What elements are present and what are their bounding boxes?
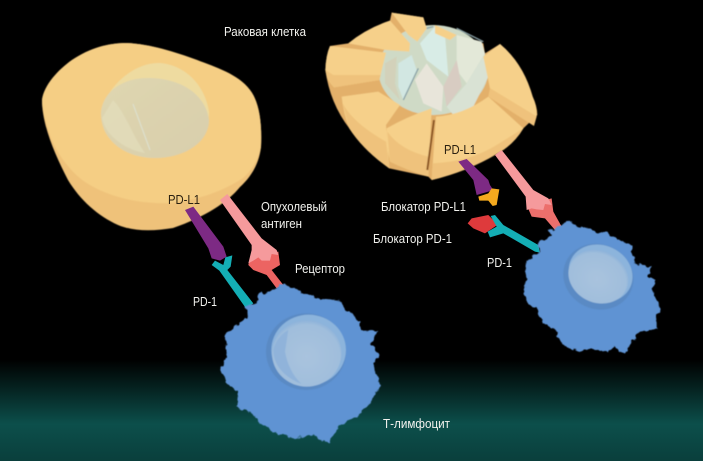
left receptors [185, 194, 283, 308]
right T-cell nucleus [552, 232, 644, 321]
label: antigen line 2: антиген [261, 216, 302, 231]
PD-L1 blocker yellow [478, 188, 499, 206]
tumour antigen pink [495, 150, 552, 210]
label: PD-1 blocker: Блокатор PD-1 [373, 231, 452, 246]
labels [168, 24, 512, 431]
PD-1 blocker red [468, 215, 497, 233]
top surface [42, 43, 261, 203]
left cancer cell [42, 43, 261, 230]
right T-cell [523, 222, 660, 355]
label: PD-1 right: PD-1 [487, 255, 512, 270]
tumour antigen pink [220, 194, 278, 263]
wedges [325, 13, 537, 180]
PD-1 teal [212, 255, 253, 308]
PD-L1 purple [185, 207, 227, 261]
label: cancer cell: Раковая клетка [224, 24, 307, 39]
PD-L1 purple [458, 159, 493, 195]
PD-1 teal [488, 215, 540, 253]
left T-cell [222, 283, 380, 443]
label: PD-1 left: PD-1 [193, 294, 217, 309]
label: tumour antigen: Опухолевый [261, 199, 327, 214]
label: PD-L1 blocker: Блокатор PD-L1 [381, 199, 466, 214]
label: PD-L1 left: PD-L1 [168, 192, 200, 207]
nucleus [101, 63, 209, 158]
label: T lymphocyte: Т-лимфоцит [383, 416, 450, 431]
label: PD-L1 right: PD-L1 [444, 142, 476, 157]
label: receptor: Рецептор [295, 261, 345, 276]
right cancer cell [325, 13, 537, 180]
nucleus fragments [378, 25, 488, 115]
receptor red [248, 252, 283, 288]
wedge side faces [325, 70, 537, 180]
right receptors [458, 150, 562, 253]
receptor red [527, 198, 562, 230]
left T-cell nucleus [266, 313, 346, 390]
